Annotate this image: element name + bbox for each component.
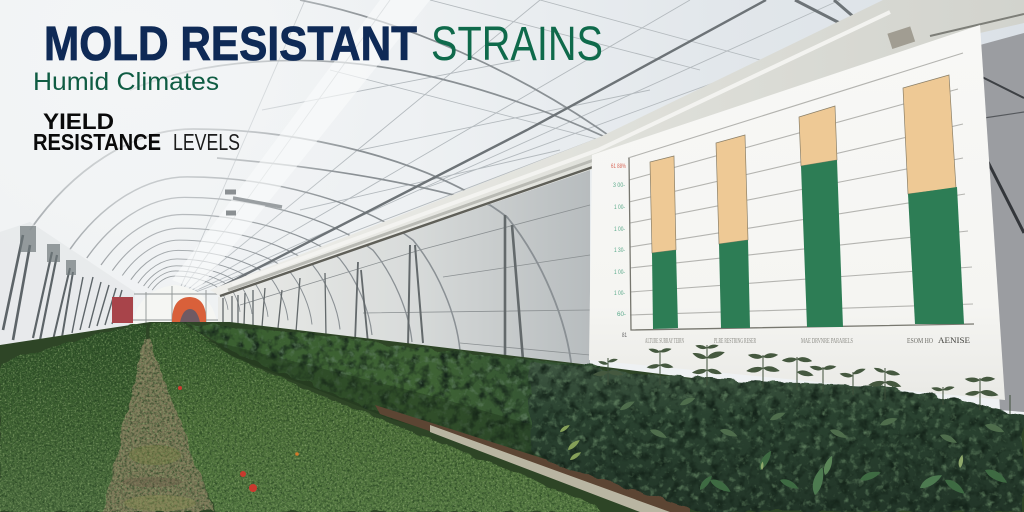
y axis labels: 1 30- <box>614 248 625 254</box>
title: STRAINS <box>431 18 603 71</box>
chart board <box>589 25 1005 400</box>
y axis labels: 1 00- <box>614 291 625 297</box>
y axis labels <box>611 164 627 339</box>
roof haze overlay <box>0 0 400 320</box>
right side wall panels <box>218 170 590 375</box>
y axis labels: 60- <box>617 312 626 318</box>
bar 2 <box>716 135 750 328</box>
chart axes <box>629 158 974 330</box>
yield resistance levels heading: YIELD <box>43 109 114 134</box>
wall posts <box>223 215 523 360</box>
title: MOLD RESISTANT <box>44 18 417 71</box>
yield resistance levels heading: LEVELS <box>173 129 240 155</box>
bed side shadow <box>200 338 570 468</box>
ground under the beds <box>0 322 1024 512</box>
y axis labels: 1 00- <box>614 227 625 233</box>
bar 1 <box>650 156 678 329</box>
x axis labels: ESOM HO <box>907 337 933 345</box>
x axis labels: PLRE RESTRING RESER <box>714 337 756 345</box>
yield resistance levels heading: RESISTANCE <box>33 129 161 155</box>
y axis labels: 1 00- <box>614 270 625 276</box>
red sign <box>112 297 133 323</box>
chart grid lines <box>628 53 973 315</box>
middle plant bed <box>150 323 600 512</box>
y axis labels: 1 00- <box>614 205 625 211</box>
right wall behind chart board <box>980 33 1024 412</box>
x axis labels <box>645 336 970 345</box>
lower leaves <box>559 395 1009 496</box>
y axis labels: 3 00- <box>613 183 625 189</box>
side wall beam <box>210 0 1024 296</box>
roof haze band <box>172 0 430 290</box>
subtitle: Humid Climates <box>33 68 219 96</box>
x axis labels: AENISE <box>938 336 970 345</box>
x axis labels: ALTURE SURRAY TEIRN <box>645 337 684 345</box>
bar 4 <box>903 75 964 324</box>
yield resistance levels heading <box>33 109 240 155</box>
left plant bed <box>0 325 147 512</box>
right plant bed <box>183 323 600 480</box>
left side wall <box>0 222 135 366</box>
y axis labels: 61 88% <box>611 164 626 170</box>
red flowers <box>178 386 299 492</box>
greenhouse roof <box>0 0 1024 340</box>
x axis labels: MAE DRVNRE PARARELS <box>801 337 853 345</box>
y axis labels: 81 <box>622 333 627 339</box>
plant sprigs <box>608 345 1010 415</box>
wooden bed rail <box>375 405 690 512</box>
tall foreground plants <box>530 343 1024 512</box>
orange dome <box>172 297 206 322</box>
end wall with window <box>112 285 218 330</box>
centre path <box>103 340 214 512</box>
arched roof ribs <box>30 0 622 370</box>
roof purlins <box>215 0 892 290</box>
bar 3 <box>799 106 843 327</box>
